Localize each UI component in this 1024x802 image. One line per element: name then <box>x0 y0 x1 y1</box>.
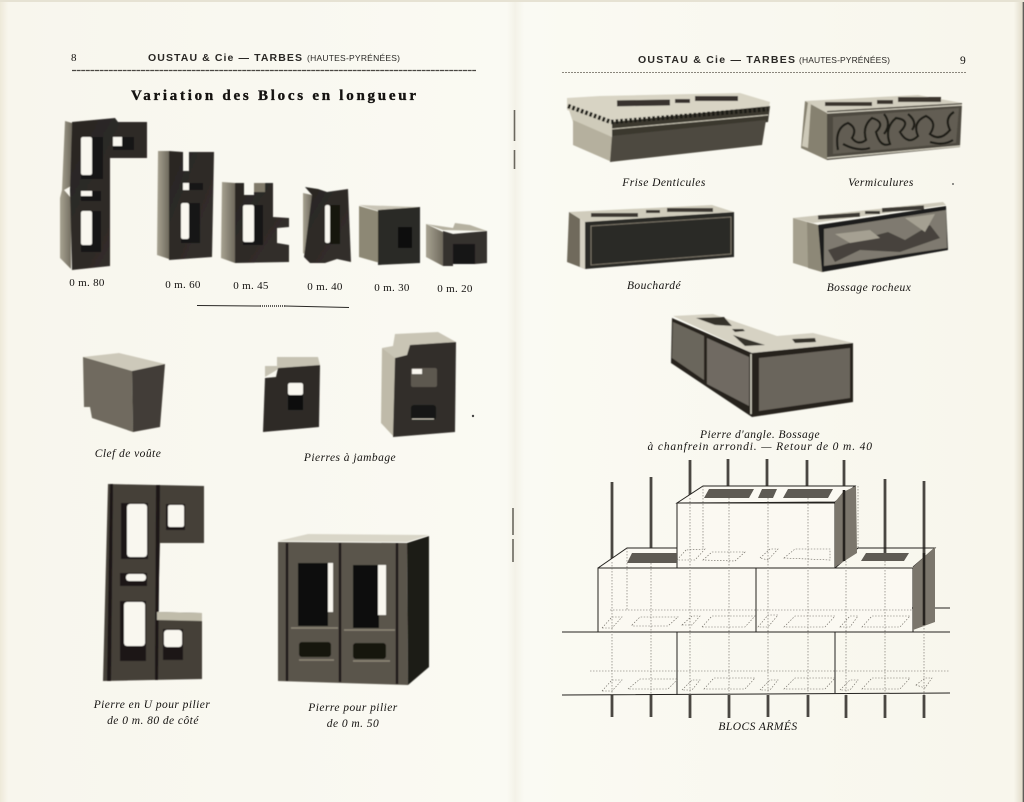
block 0 m. 45 <box>221 182 289 263</box>
icon: bossage rocheux <box>793 202 948 272</box>
shaded block ends <box>835 486 857 567</box>
caption: pierre d'angle: à chanfrein arrondi. — Retour de 0 m. 40 <box>648 441 872 453</box>
left page header: (HAUTES-PYRÉNÉES) <box>307 53 400 63</box>
right page header <box>562 54 967 72</box>
left page header: 8 <box>71 52 77 64</box>
dimension labels: 0 m. 80 <box>69 277 105 289</box>
dimension labels: 0 m. 40 <box>307 281 343 293</box>
block 0 m. 80 <box>60 118 147 270</box>
right page header: 9 <box>960 55 966 67</box>
caption: pierre pour pilier: de 0 m. 50 <box>327 718 379 730</box>
icon: pierre pour pilier <box>278 534 429 685</box>
stray print specks <box>472 183 954 417</box>
icon: vermiculures <box>801 95 962 160</box>
icon: clef de voute <box>83 353 165 432</box>
block 0 m. 30 <box>359 205 420 265</box>
caption: pierre en U <box>93 699 210 727</box>
block 0 m. 20 <box>426 223 487 266</box>
rods <box>612 459 924 718</box>
icon: pierre a jambage large <box>381 332 456 437</box>
left page header: OUSTAU & Cie — TARBES <box>148 52 302 64</box>
icon: pierre a jambage small <box>263 357 320 432</box>
caption: pierre d'angle: Pierre d'angle. Bossage <box>699 429 820 441</box>
cell openings <box>627 489 909 563</box>
caption: blocs armes: BLOCS ARMÉS <box>718 719 798 733</box>
icon: frise denticules <box>567 93 770 162</box>
caption: pierre en U: Pierre en U pour pilier <box>93 699 210 711</box>
left page header <box>71 52 476 70</box>
block 0 m. 40 <box>303 187 351 263</box>
caption: frise denticules: Frise Denticules <box>621 177 706 189</box>
dimension labels: 0 m. 60 <box>165 279 201 291</box>
caption: pierre pour pilier: Pierre pour pilier <box>307 702 398 714</box>
block outlines <box>562 486 950 695</box>
caption: vermiculures: Vermiculures <box>848 177 914 189</box>
block 0 m. 60 <box>157 151 214 260</box>
dimension labels <box>69 277 473 295</box>
diagram: blocs armes <box>562 459 950 718</box>
title: Variation des Blocs en longueur <box>131 88 416 104</box>
dimension labels: 0 m. 20 <box>437 283 473 295</box>
caption: bossage rocheux: Bossage rocheux <box>827 282 912 294</box>
caption: pierres a jambage: Pierres à jambage <box>303 452 396 464</box>
icon: pierre d'angle <box>671 314 853 417</box>
caption: boucharde: Bouchardé <box>627 280 681 292</box>
caption: pierre d'angle <box>648 429 872 453</box>
hidden reinforcement lines <box>590 486 950 695</box>
icon: pierre en U <box>103 484 204 681</box>
caption: clef de voute: Clef de voûte <box>95 448 161 460</box>
right page header: OUSTAU & Cie — TARBES <box>638 54 795 66</box>
block lengths row <box>60 118 487 270</box>
binding marks <box>513 110 514 562</box>
dimension labels: 0 m. 45 <box>233 280 269 292</box>
caption: pierre en U: de 0 m. 80 de côté <box>107 715 199 727</box>
icon: boucharde <box>567 205 734 269</box>
caption: pierre pour pilier <box>307 702 398 730</box>
dimension labels: 0 m. 30 <box>374 282 410 294</box>
right page header: (HAUTES-PYRÉNÉES) <box>799 55 890 65</box>
